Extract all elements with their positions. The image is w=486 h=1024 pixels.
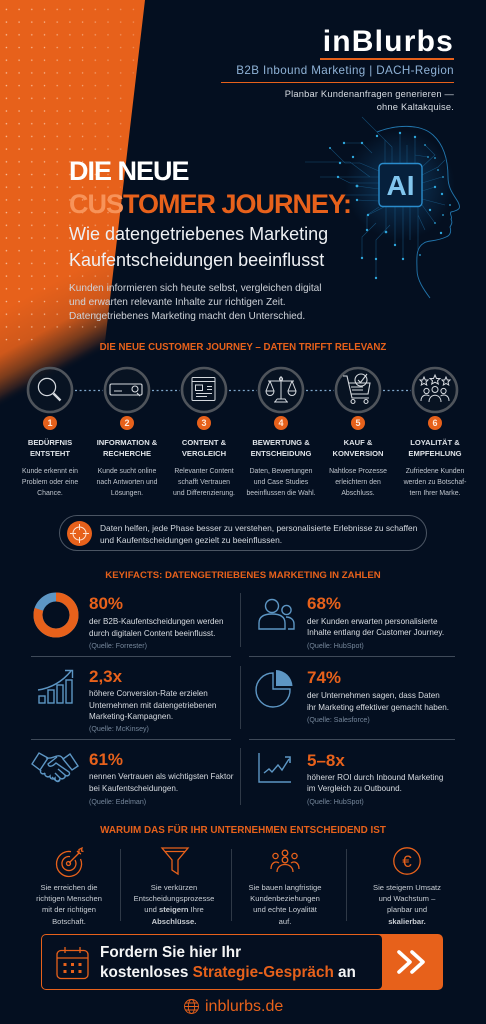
icon: handshake [31, 752, 79, 786]
stat: 5–8x [255, 748, 455, 810]
stat: 68% [258, 594, 444, 650]
callout text: Daten helfen, jede Phase besser zu verstehen, personalisierte Erlebnisse zu schaffen [100, 522, 417, 532]
step 4 [246, 366, 316, 497]
value: 61% [89, 750, 123, 769]
number 1: 1 [47, 418, 52, 428]
text [89, 688, 216, 723]
text: richtigen Menschen [36, 894, 102, 903]
intro paragraph: und erwarten relevante Inhalte zur richtigen Zeit. [69, 297, 286, 308]
step 2 [96, 366, 157, 497]
text: bei Kaufentscheidungen. [89, 784, 178, 793]
panel: why it matters [0, 823, 486, 923]
text 5: Nahtlose Prozesse [329, 468, 387, 474]
text 3: und Differenzierung. [173, 490, 235, 497]
text: durch digitalen Content beeinflusst. [89, 629, 215, 638]
heading: why: WARUIM DAS FÜR IHR UNTERNEHMEN ENTSCHEIDEND IST [100, 824, 386, 836]
text: und echte Loyalität [253, 905, 317, 914]
logo underline [320, 58, 454, 60]
header claim: Planbar Kundenanfragen generieren — [285, 89, 454, 99]
number 2: 2 [124, 418, 130, 428]
icon: line chart [258, 752, 292, 784]
icon: pie chart [255, 669, 293, 707]
text [24, 882, 114, 927]
text: auf. [279, 917, 291, 926]
label 4: BEWERTUNG & [252, 438, 310, 447]
text: Sie verkürzen [151, 882, 197, 892]
text: Inhalte entlang der Customer Journey. [307, 628, 444, 637]
text 5: Abschluss. [341, 490, 375, 497]
text 1: Problem oder eine [22, 479, 78, 486]
AI chip: AI [386, 170, 414, 201]
value: 80% [89, 594, 123, 613]
callout [59, 515, 426, 550]
text: Sie bauen langfristige [248, 882, 322, 892]
icon: euro: € [402, 852, 412, 871]
heading: key facts: KEYIFACTS: DATENGETRIEBENES MARKETING IN ZAHLEN [105, 570, 381, 580]
text 2: nach Antworten und [97, 479, 157, 486]
icon: growth bars [38, 669, 76, 709]
icon: content page [180, 366, 228, 414]
stat: 80% [34, 592, 224, 650]
connector dots [75, 390, 411, 392]
number 6: 6 [432, 418, 438, 428]
step 3 [173, 366, 235, 497]
callout text: und Kaufentscheidungen gezielt zu beeinflussen. [100, 534, 282, 544]
text 3 [173, 468, 235, 497]
label 2: INFORMATION & [97, 438, 157, 447]
text 1: Kunde erkennt ein [22, 468, 78, 474]
chart: donut 80% [34, 592, 78, 638]
heading: journey: DIE NEUE CUSTOMER JOURNEY – DATEN TRIFFT RELEVANZ [100, 342, 386, 353]
number 6 [428, 416, 442, 430]
text 2 [96, 468, 157, 497]
number 5: 5 [355, 418, 360, 428]
text: mit der richtigen [42, 905, 96, 914]
value: 2,3x [89, 667, 122, 686]
orange diagonal background panel with dots [0, 0, 145, 402]
text 5 [329, 468, 387, 497]
label 4: ENTSCHEIDUNG [251, 449, 311, 458]
icon: magnifier [26, 366, 74, 414]
icon: community [270, 848, 300, 874]
text: und steigern Ihre [144, 905, 204, 914]
subtitle: Wie datengetriebenes Marketing [69, 224, 328, 244]
label 5: KAUF & [344, 438, 372, 447]
CTA inner panel [42, 935, 382, 989]
text: Entscheidungsprozesse [134, 894, 214, 903]
number 1 [43, 416, 57, 430]
intro paragraph: Kunden informieren sich heute selbst, vergleichen digital [69, 283, 322, 294]
callout text [100, 522, 417, 544]
AI chip [379, 164, 422, 206]
stat: 2,3x [31, 665, 231, 735]
label 1 [28, 438, 72, 458]
icon: calendar [56, 946, 89, 980]
text: der B2B-Kaufentscheidungen werden [89, 617, 224, 626]
text 6: tern Ihrer Marke. [410, 490, 460, 497]
label 4 [251, 438, 311, 458]
stat: 61% [31, 748, 231, 810]
text 4 [246, 468, 316, 497]
column: community [235, 846, 335, 924]
icon: globe [184, 998, 199, 1014]
icon: people [258, 598, 295, 630]
footer: website [183, 996, 287, 1016]
text [357, 882, 457, 927]
text: der Kunden erwarten personalisierte [307, 616, 437, 626]
text 1 [22, 468, 78, 497]
title: DIE NEUE [69, 156, 189, 186]
step 1 [22, 366, 78, 497]
number 5 [351, 416, 365, 430]
label 1: ENTSTEHT [30, 449, 70, 458]
column: funnel [124, 846, 224, 924]
step 6 [404, 366, 466, 497]
text: nennen Vertrauen als wichtigsten Faktor [89, 772, 233, 781]
text: Botschaft. [52, 917, 86, 926]
icon: target badge [67, 521, 92, 546]
label 1: BEDÜRFNIS [28, 438, 72, 447]
text 4: Daten, Bewertungen [250, 468, 312, 474]
step 5 [329, 366, 387, 497]
text: höherer ROI durch Inbound Marketing [307, 772, 443, 782]
text 1: Chance. [37, 490, 63, 497]
title: CUSTOMER JOURNEY: [69, 189, 351, 219]
text: der Unternehmen sagen, dass Daten [307, 691, 440, 700]
source: (Quelle: HubSpot) [307, 642, 364, 650]
text: höhere Conversion-Rate erzielen [89, 689, 208, 698]
url: inblurbs.de [205, 998, 283, 1015]
number 4 [274, 416, 288, 430]
CTA text: kostenloses Strategie-Gespräch an [100, 964, 356, 981]
call to action [41, 934, 443, 990]
icon: funnel [161, 847, 189, 875]
icon: target [54, 847, 84, 877]
text: Kundenbeziehungen [250, 894, 320, 903]
header claim: ohne Kaltakquise. [377, 102, 454, 112]
icon: scales [258, 366, 304, 414]
number 3 [197, 416, 211, 430]
tagline: B2B Inbound Marketing | DACH-Region [236, 64, 454, 77]
text 4: beeinflussen die Wahl. [246, 490, 316, 497]
value: 74% [307, 668, 341, 687]
icon: search bar [104, 366, 150, 414]
label 6 [408, 438, 462, 458]
text: Marketing-Kampagnen. [89, 712, 173, 721]
text [307, 690, 449, 713]
text: Abschlüsse. [152, 917, 196, 926]
number 2 [120, 416, 134, 430]
text [89, 771, 233, 794]
column: euro [357, 846, 457, 924]
text 6: Zufriedene Kunden [406, 468, 464, 474]
text 3: schafft Vertrauen [178, 479, 230, 486]
text 2: Lösungen. [111, 490, 143, 497]
subtitle [69, 224, 328, 270]
panel: key facts [31, 570, 449, 806]
text [307, 772, 443, 795]
CTA text: Fordern Sie hier Ihr [100, 944, 241, 961]
icon: AI head with circuits [305, 116, 460, 298]
text: im Vergleich zu Outbound. [307, 784, 402, 793]
icon: euro [393, 847, 421, 875]
text 6 [404, 468, 466, 497]
tagline underline [221, 82, 454, 83]
label 2 [97, 438, 157, 458]
text: ihr Marketing effektiver gemacht haben. [307, 703, 449, 712]
label 5: KONVERSION [332, 449, 384, 458]
label 3: VERGLEICH [182, 449, 226, 458]
label 3: CONTENT & [182, 438, 226, 447]
source: (Quelle: HubSpot) [307, 798, 364, 806]
panel: customer journey [22, 342, 466, 551]
source: (Quelle: Forrester) [89, 642, 147, 650]
stat: 74% [255, 665, 455, 730]
text [124, 882, 224, 927]
label 6: EMPFEHLUNG [408, 449, 462, 458]
icon: chevrons [397, 950, 427, 974]
text 4: und Case Studies [254, 479, 308, 486]
header claim [285, 89, 454, 112]
text [235, 882, 335, 927]
label 5 [332, 438, 384, 458]
text: planbar und [387, 905, 427, 914]
number 3: 3 [201, 418, 206, 428]
label 6: LOYALITÄT & [410, 438, 460, 447]
number 4: 4 [278, 418, 284, 428]
intro paragraph: Datengetriebenes Marketing macht den Unterschied. [69, 311, 305, 322]
text 2: Kunde sucht online [98, 468, 156, 474]
source: (Quelle: Edelman) [89, 798, 146, 806]
intro paragraph [69, 283, 322, 322]
label 3 [182, 438, 226, 458]
text: Sie steigern Umsatz [373, 882, 441, 892]
text: Sie erreichen die [40, 882, 98, 892]
text: skalierbar. [388, 917, 426, 926]
text 3: Relevanter Content [174, 468, 234, 474]
text 5: erleichtern den [335, 479, 381, 486]
CTA text [100, 943, 356, 983]
value: 5–8x [307, 751, 345, 770]
text [307, 616, 444, 637]
subtitle: Kaufentscheidungen beeinflusst [69, 250, 324, 270]
label 2: RECHERCHE [103, 449, 151, 458]
column: target [24, 846, 114, 924]
text [89, 617, 224, 638]
source: (Quelle: McKinsey) [89, 725, 149, 733]
text 6: werden zu Botschaf- [404, 479, 466, 486]
source: (Quelle: Salesforce) [307, 716, 370, 724]
title [69, 156, 351, 219]
logo: inBlurbs: inBlurbs [323, 25, 454, 58]
icon: shopping cart [334, 366, 382, 414]
text: und Wachstum – [379, 894, 435, 903]
text: Unternehmen mit datengetriebenen [89, 701, 216, 710]
value: 68% [307, 594, 341, 613]
icon: stars and people [412, 366, 458, 414]
